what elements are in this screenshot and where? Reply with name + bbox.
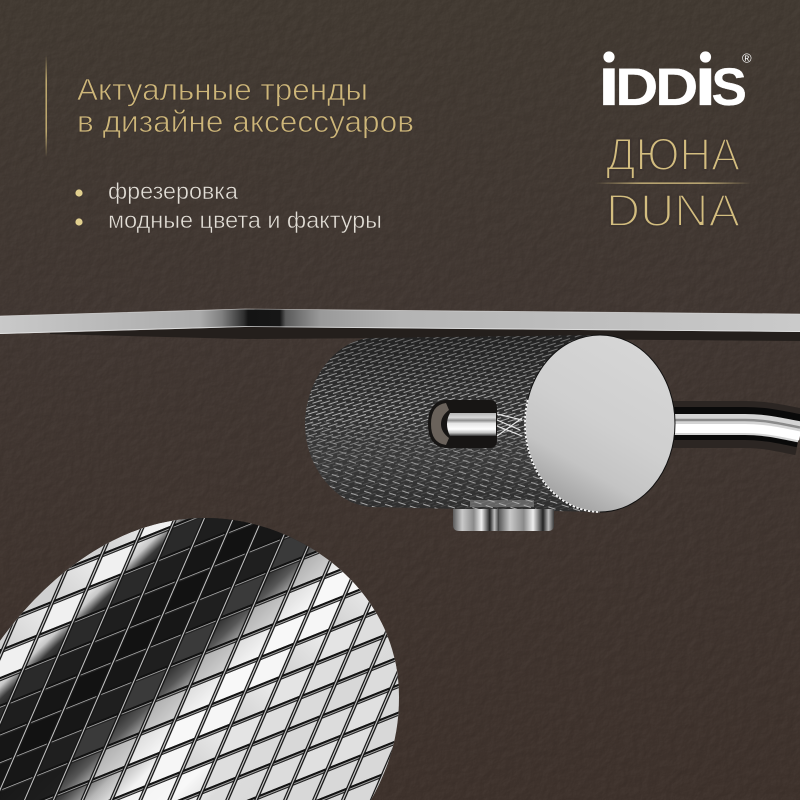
product name xyxy=(595,129,751,236)
bullet list: модные цвета и фактуры xyxy=(108,207,382,233)
bullet list: фрезеровка xyxy=(108,178,238,204)
product name: ДЮНА xyxy=(606,129,740,180)
heading: Актуальные тренды xyxy=(77,72,368,107)
diamond cells xyxy=(0,518,398,792)
knurled cylinder body xyxy=(305,335,600,512)
chrome end disc xyxy=(525,335,675,512)
iddis logo: S xyxy=(712,58,747,117)
product name: DUNA xyxy=(606,185,740,236)
handle knob xyxy=(428,400,522,448)
iddis logo: I xyxy=(598,57,620,116)
pipe xyxy=(670,420,800,436)
heading xyxy=(77,72,414,139)
gold vertical rule xyxy=(46,55,47,157)
iddis logo: D xyxy=(655,57,698,116)
iddis logo: I xyxy=(695,57,716,116)
shelf shadow xyxy=(50,327,800,341)
iddis logo: ® xyxy=(742,50,752,66)
heading: в дизайне аксессуаров xyxy=(77,104,414,139)
iddis logo: D xyxy=(615,57,658,116)
bullet list xyxy=(75,178,382,233)
lattice grooves xyxy=(0,518,400,800)
knurled texture macro circle xyxy=(0,518,399,800)
chrome shelf xyxy=(0,309,800,334)
bottom screws xyxy=(453,500,554,531)
mosaic base shading xyxy=(0,518,400,800)
iddis logo xyxy=(598,50,752,117)
